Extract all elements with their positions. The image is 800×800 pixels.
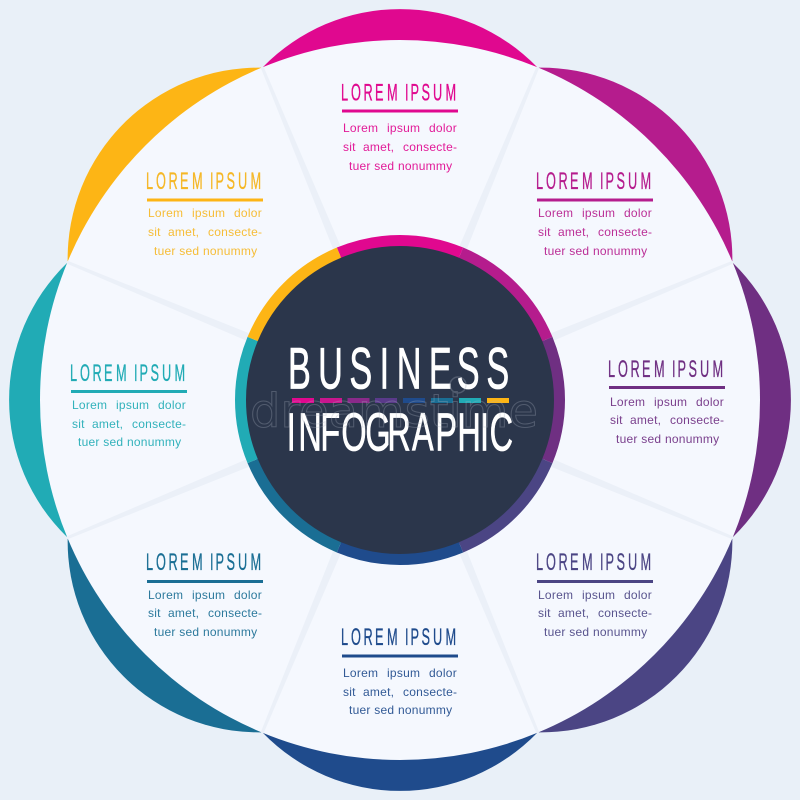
colored ring <box>240 240 560 560</box>
block: left: LOREM IPSUM <box>70 360 185 387</box>
block: right: ipsum <box>654 395 687 409</box>
center circle <box>245 245 555 555</box>
block: right: dolor <box>696 395 724 409</box>
block: bottom right: consecte- <box>598 606 652 620</box>
block: right: LOREM IPSUM <box>608 356 723 383</box>
block: bottom right: amet, <box>558 606 589 620</box>
block: right: Lorem <box>610 395 645 409</box>
block: bottom: Lorem <box>343 666 378 680</box>
block: top left: tuer sed nonummy <box>154 244 257 258</box>
block: top right: tuer sed nonummy <box>544 244 647 258</box>
block: top right: consecte- <box>598 225 652 239</box>
block: right <box>608 356 725 446</box>
block: top: ipsum <box>387 121 420 135</box>
block: bottom left: ipsum <box>192 588 225 602</box>
block: bottom: amet, <box>363 685 394 699</box>
block: top right: Lorem <box>538 206 573 220</box>
block: bottom <box>341 624 458 717</box>
block: bottom right: dolor <box>624 588 652 602</box>
block: left: amet, <box>92 417 123 431</box>
block: left: Lorem <box>72 398 107 412</box>
title dashes <box>292 398 509 403</box>
block: top: sit <box>343 140 356 154</box>
block: bottom: ipsum <box>387 666 420 680</box>
block: top right <box>536 168 653 258</box>
block: top left: dolor <box>234 206 262 220</box>
watermark: dreamstime <box>250 384 538 438</box>
block: bottom left <box>146 549 263 639</box>
block: bottom right <box>536 549 653 639</box>
block: top: dolor <box>429 121 457 135</box>
block: top right: LOREM IPSUM <box>536 168 651 195</box>
block: left: sit <box>72 417 85 431</box>
block: left: dolor <box>158 398 186 412</box>
block: bottom: LOREM IPSUM <box>341 624 456 651</box>
block: top left: LOREM IPSUM <box>146 168 261 195</box>
block: top: amet, <box>363 140 394 154</box>
block: top right: ipsum <box>582 206 615 220</box>
block: top left: consecte- <box>208 225 262 239</box>
block: bottom right: LOREM IPSUM <box>536 549 651 576</box>
block: top: LOREM IPSUM <box>341 79 456 107</box>
title: business: BUSINESS <box>288 337 509 402</box>
block: left: tuer sed nonummy <box>78 435 181 449</box>
block: bottom right: Lorem <box>538 588 573 602</box>
block: bottom left: dolor <box>234 588 262 602</box>
block: top left: sit <box>148 225 161 239</box>
block: right: tuer sed nonummy <box>616 432 719 446</box>
block: bottom right: tuer sed nonummy <box>544 625 647 639</box>
block: bottom left: amet, <box>168 606 199 620</box>
block: bottom left: consecte- <box>208 606 262 620</box>
block: top <box>341 79 458 173</box>
block: bottom right: ipsum <box>582 588 615 602</box>
block: right: amet, <box>630 413 661 427</box>
block: top: tuer sed nonummy <box>349 159 452 173</box>
block: left <box>70 360 187 449</box>
block: bottom right: sit <box>538 606 551 620</box>
block: top left: amet, <box>168 225 199 239</box>
block: bottom left: LOREM IPSUM <box>146 549 261 576</box>
block: top right: amet, <box>558 225 589 239</box>
block: left: consecte- <box>132 417 186 431</box>
block: top left: ipsum <box>192 206 225 220</box>
block: right: consecte- <box>670 413 724 427</box>
block: top: consecte- <box>403 140 457 154</box>
block: top: Lorem <box>343 121 378 135</box>
block: right: sit <box>610 413 623 427</box>
block: bottom: consecte- <box>403 685 457 699</box>
block: left: ipsum <box>116 398 149 412</box>
block: top right: dolor <box>624 206 652 220</box>
block: top right: sit <box>538 225 551 239</box>
block: bottom left: Lorem <box>148 588 183 602</box>
block: bottom: dolor <box>429 666 457 680</box>
block: top left: Lorem <box>148 206 183 220</box>
block: bottom left: tuer sed nonummy <box>154 625 257 639</box>
block: bottom left: sit <box>148 606 161 620</box>
title: infographic: INFOGRAPHIC <box>287 403 513 463</box>
block: bottom: sit <box>343 685 356 699</box>
block: bottom: tuer sed nonummy <box>349 703 452 717</box>
block: top left <box>146 168 263 258</box>
